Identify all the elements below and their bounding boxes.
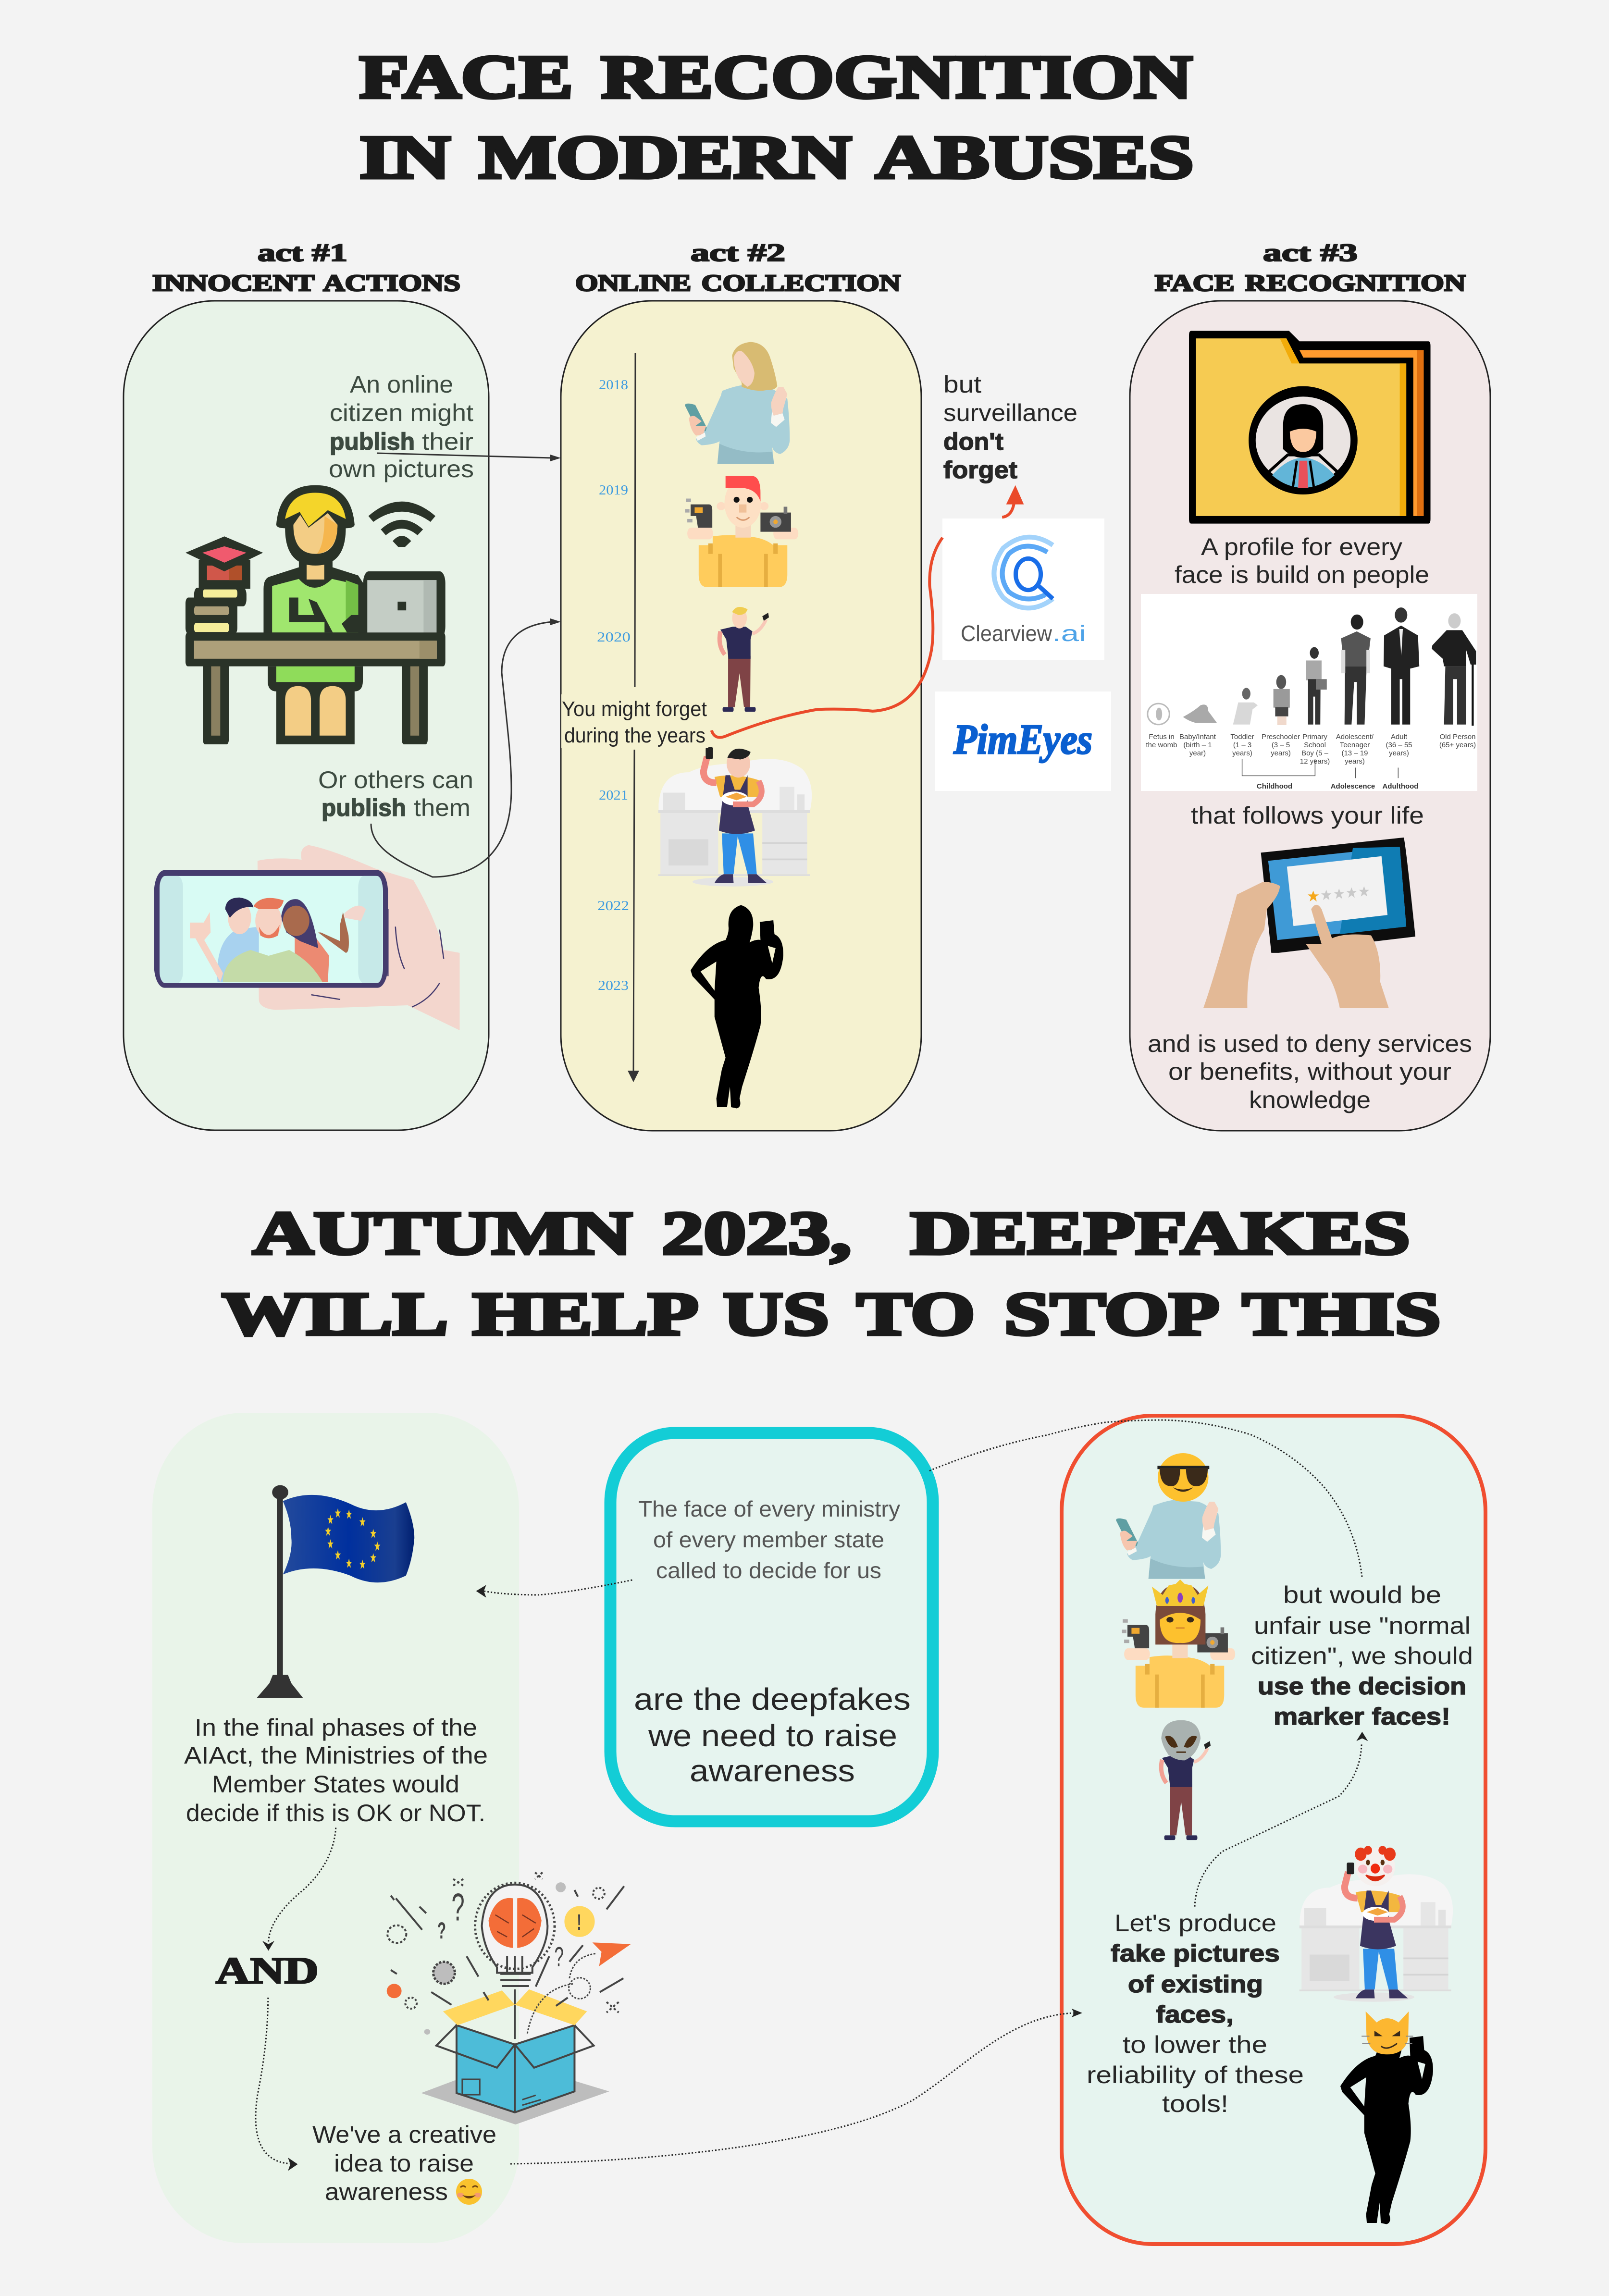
- heading: act 1: act #1: [258, 239, 347, 267]
- chart: human life stages: Primary: [1302, 733, 1327, 741]
- figure: cook with clown emoji: [1300, 1846, 1453, 2002]
- panel: online collection: [561, 301, 921, 1131]
- heading: autumn 2023 deepfakes: AUTUMN 2023, DEEPFAKES: [253, 1199, 1410, 1267]
- text: a profile for every face: A profile for every: [1201, 533, 1402, 560]
- arrow: final phases to AND: [262, 1827, 336, 1950]
- text: are the deepfakes: are the deepfakes: [634, 1682, 911, 1716]
- timeline years: 2023: [598, 978, 629, 993]
- text: final phases of the AI Act: decide if this is OK or NOT.: [186, 1800, 485, 1827]
- text: used to deny services: or benefits, without your: [1168, 1058, 1451, 1085]
- text: are the deepfakes: [634, 1682, 911, 1788]
- icon: idea box with brain bulb: !: [577, 1911, 582, 1935]
- heading: act 3: [1155, 239, 1466, 296]
- title: [359, 43, 1194, 191]
- figure: woman with sunglasses emoji: [1116, 1453, 1221, 1579]
- text: but surveillance don't forget: [943, 371, 1077, 483]
- heading: act 1: INNOCENT ACTIONS: [152, 270, 460, 296]
- icon: idea box with brain bulb: [387, 1872, 631, 2124]
- chart: human life stages: (36 – 55: [1386, 741, 1412, 749]
- heading: AND: AND: [216, 1950, 319, 1991]
- text: or others can publish: Or others can: [318, 766, 473, 793]
- icon: student at desk: [186, 485, 446, 744]
- timeline arrow: [628, 353, 639, 1082]
- text: let's produce fake pictures: of existing: [1128, 1971, 1263, 1998]
- panel: innocent actions: [124, 301, 489, 1130]
- title: IN MODERN ABUSES: [359, 123, 1194, 191]
- chart: human life stages: the womb: [1146, 741, 1177, 749]
- text: but surveillance don't forget: forget: [943, 457, 1017, 483]
- icon: smiling emoji: [456, 2179, 482, 2205]
- text: used to deny services: knowledge: [1249, 1086, 1371, 1113]
- chart: human life stages: Boy (5 –: [1301, 749, 1329, 757]
- figure: man with alien emoji: [1161, 1720, 1211, 1840]
- text: are the deepfakes: we need to raise: [648, 1718, 897, 1753]
- chart: human life stages: (65+ years): [1439, 741, 1476, 749]
- panel: fake pictures: [1062, 1416, 1485, 2244]
- heading: act 3: FACE RECOGNITION: [1155, 270, 1466, 296]
- chart: human life stages: Adolescence: [1331, 782, 1375, 790]
- text: creative idea: idea to raise: [334, 2150, 474, 2177]
- chart: human life stages: (3 – 5: [1272, 741, 1290, 749]
- arrow: ministry to decision maker faces: [929, 1420, 1362, 1579]
- chart: human life stages: year): [1189, 749, 1206, 757]
- arrow: ministries to flag: [476, 1580, 632, 1598]
- text: unfair use normal citizen: use the decision: [1258, 1673, 1466, 1700]
- arrow: AND to idea: [256, 1998, 298, 2171]
- arrow: idea to fake pictures: [510, 2009, 1082, 2164]
- text: let's produce fake pictures: [1087, 1910, 1304, 2117]
- logo card: Clearview.ai: [942, 518, 1104, 660]
- text: creative idea: We've a creative: [312, 2121, 496, 2148]
- timeline years: 2018: [599, 377, 628, 393]
- text: you might forget: You might forget: [562, 697, 707, 721]
- text: unfair use normal citizen: [1251, 1581, 1473, 1730]
- panel: ministries and idea: [152, 1413, 519, 2243]
- text: a profile for every face: [1175, 533, 1429, 588]
- icon: idea box with brain bulb: ?: [437, 1918, 446, 1944]
- icon: idea box with brain bulb: ?: [451, 1886, 465, 1929]
- figure: woman with phone: [685, 342, 790, 464]
- timeline years: 2022: [597, 898, 629, 913]
- text: creative idea: awareness: [325, 2178, 448, 2205]
- heading: act 2: act #2: [691, 239, 785, 267]
- logo card: PimEyes: PimEyes: [953, 716, 1092, 763]
- text: final phases of the AI Act: [184, 1714, 488, 1827]
- icon: EU flag: [257, 1485, 414, 1698]
- icon: idea box with brain bulb: ?: [554, 1942, 564, 1973]
- title: FACE RECOGNITION: [359, 43, 1192, 111]
- text: but surveillance don't forget: but: [943, 371, 981, 398]
- text: final phases of the AI Act: Member States would: [212, 1771, 459, 1798]
- logo card: PimEyes: [935, 691, 1111, 791]
- timeline years: 2019: [599, 482, 628, 498]
- heading: act 2: [575, 239, 901, 296]
- text: final phases of the AI Act: AIAct, the Ministries of the: [184, 1742, 488, 1769]
- logo card: Clearview.ai: Clearview: [961, 621, 1052, 646]
- heading: autumn 2023 deepfakes: [222, 1199, 1441, 1348]
- chart: human life stages: Childhood: [1257, 782, 1292, 790]
- text: used to deny services: and is used to deny services: [1148, 1030, 1472, 1057]
- text: creative idea: [312, 2121, 496, 2205]
- chart: human life stages: Old Person: [1439, 733, 1476, 741]
- text: or others can publish: them: [414, 794, 470, 821]
- icon: profile folder: [1189, 331, 1431, 524]
- text: an online citizen: citizen might: [330, 399, 473, 426]
- chart: human life stages: Toddler: [1230, 733, 1254, 741]
- icon: hands rating on tablet: [1203, 838, 1415, 1008]
- heading: act 1: [152, 239, 460, 296]
- text: or others can publish: publish: [322, 794, 406, 821]
- figure: silhouette with cat emoji: [1340, 2012, 1433, 2224]
- text: but surveillance don't forget: surveillance: [943, 399, 1077, 426]
- text: a profile for every face: face is build on people: [1175, 561, 1429, 588]
- text: are the deepfakes: awareness: [690, 1753, 855, 1788]
- text: the face of every ministry: called to decide for us: [656, 1558, 881, 1583]
- chart: human life stages: (birth – 1: [1183, 741, 1212, 749]
- chart: human life stages: Fetus in: [1149, 733, 1175, 741]
- text: an online citizen: publish: [330, 428, 415, 455]
- panel: deepfake faces: [610, 1433, 933, 1821]
- text: or others can publish: [318, 766, 473, 821]
- text: used to deny services: [1148, 1030, 1472, 1113]
- text: unfair use normal citizen: citizen", we should: [1251, 1642, 1473, 1669]
- text: unfair use normal citizen: but would be: [1283, 1581, 1441, 1608]
- chart: human life stages: years): [1271, 749, 1291, 757]
- text: but surveillance don't forget: don't: [943, 428, 1003, 455]
- text: the face of every ministry: The face of every ministry: [638, 1496, 900, 1521]
- chart: human life stages: years): [1345, 757, 1365, 765]
- text: the face of every ministry: of every member state: [653, 1527, 884, 1552]
- chart: human life stages: Adult: [1391, 733, 1408, 741]
- chart: human life stages: years): [1232, 749, 1252, 757]
- text: an online citizen: own pictures: [329, 456, 474, 482]
- text: let's produce fake pictures: Let's produce: [1114, 1910, 1276, 1937]
- icon: hand taking group selfie on phone: [154, 845, 460, 1030]
- chart: human life stages: Preschooler: [1262, 733, 1300, 741]
- figure: selfie man: [719, 607, 769, 712]
- text: unfair use normal citizen: unfair use "normal: [1254, 1612, 1471, 1639]
- chart: human life stages: years): [1389, 749, 1409, 757]
- heading: act 3: act #3: [1263, 239, 1358, 267]
- text: let's produce fake pictures: tools!: [1162, 2090, 1228, 2117]
- chart: human life stages: School: [1304, 741, 1326, 749]
- arrow: others publish to online collection: [371, 618, 561, 877]
- text: an online citizen: An online: [350, 371, 453, 398]
- text: that follows your life: that follows your life: [1191, 802, 1424, 829]
- panel: face recognition: [1130, 301, 1490, 1131]
- chart: human life stages: Adolescent/: [1336, 733, 1374, 741]
- timeline years: 2020: [597, 630, 631, 645]
- heading: autumn 2023 deepfakes: WILL HELP US TO STOP THIS: [222, 1280, 1441, 1348]
- logo card: Clearview.ai: .ai: [1052, 621, 1086, 646]
- heading: act 2: ONLINE COLLECTION: [575, 270, 901, 296]
- text: an online citizen: their: [422, 428, 473, 455]
- chart: human life stages: Adulthood: [1383, 782, 1418, 790]
- chart: human life stages: (1 – 3: [1233, 741, 1251, 749]
- text: let's produce fake pictures: reliability of these: [1087, 2061, 1304, 2088]
- figure: man with cameras: [685, 476, 798, 587]
- arrow: publish to online collection: [377, 453, 561, 461]
- timeline years: 2021: [599, 788, 628, 803]
- text: you might forget: during the years: [564, 724, 705, 747]
- timeline years: [597, 377, 631, 993]
- text: final phases of the AI Act: In the final phases of the: [195, 1714, 477, 1741]
- figure: cook in kitchen: [658, 747, 812, 887]
- text: let's produce fake pictures: to lower the: [1123, 2031, 1267, 2058]
- figure: man with queen emoji: [1122, 1580, 1235, 1708]
- chart: human life stages: [1141, 594, 1477, 791]
- text: an online citizen: [329, 371, 474, 482]
- chart: human life stages: (13 – 19: [1341, 749, 1368, 757]
- text: you might forget: [561, 694, 708, 748]
- chart: human life stages: 12 years): [1300, 757, 1330, 765]
- text: unfair use normal citizen: marker faces!: [1274, 1703, 1450, 1730]
- text: let's produce fake pictures: fake pictures: [1111, 1940, 1280, 1967]
- arrow: red curve forget to surveillance: [712, 485, 1024, 737]
- figure: silhouette: [691, 905, 783, 1108]
- chart: human life stages: Baby/Infant: [1179, 733, 1216, 741]
- text: let's produce fake pictures: faces,: [1156, 2001, 1234, 2028]
- arrow: fake pictures to decision faces: [1195, 1732, 1368, 1907]
- text: the face of every ministry: [638, 1496, 900, 1583]
- chart: human life stages: Teenager: [1340, 741, 1370, 749]
